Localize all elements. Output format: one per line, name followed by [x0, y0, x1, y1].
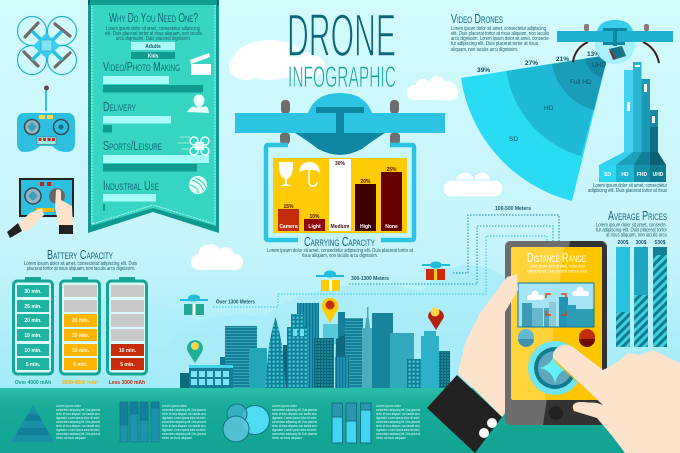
- bar: light: Light: [308, 224, 321, 230]
- text: average prices: Lorem ipsum dolor sit amet, consecte-: [596, 222, 667, 228]
- bar: high: 20%: [360, 179, 371, 185]
- label: over 1300 meters: Over 1300 Meters: [216, 300, 255, 306]
- chart: battery less 3000 mAh: 5 min.: [120, 362, 135, 368]
- mini drone: green package: [180, 294, 208, 315]
- chart: battery 3000-4000 mAh: 5 min.: [73, 362, 88, 368]
- fan labels: [477, 51, 600, 74]
- chart: battery 3000-4000 mAh: [60, 277, 100, 386]
- bar base labels: [599, 165, 666, 182]
- ground under right hand: [480, 425, 625, 453]
- icon: fragile glass: [279, 162, 293, 186]
- chart: price bars: 200$: [617, 240, 629, 246]
- text: bottom block 4: [376, 404, 421, 440]
- text: bottom block 4: dignissim. Lorem ipsum dolor sit amet,: [376, 428, 420, 432]
- bar: camera: 15%: [283, 204, 294, 210]
- bar: light: 10%: [309, 214, 320, 220]
- panel intro text: elit. Duis placerat tortor at risus aliquam, non iaculis: [105, 31, 202, 37]
- text: video quality caption: [588, 183, 667, 194]
- panel: carrying capacity chart: [273, 158, 407, 233]
- row: industrial use: Industrial Use: [103, 178, 159, 193]
- phone heading: distance range: Distance Range: [527, 250, 586, 265]
- phone text: [527, 264, 588, 274]
- cloud: behind title: [229, 40, 325, 80]
- text: bottom block 1: Lorem ipsum dolor: [56, 404, 82, 408]
- text: bottom block 1: tortor at risus aliquam, non iaculis arcu: [56, 412, 100, 416]
- map pin: green: [187, 340, 203, 363]
- bar base labels: HD: [621, 172, 629, 178]
- panel heading: Why Do You Need One?: [109, 10, 198, 25]
- row: industrial use: [103, 176, 207, 211]
- cloud: right of title: [407, 76, 458, 100]
- text: bottom block 3: consectetur adipiscing elit. Duis placerat: [272, 408, 318, 412]
- text: average prices: tur adipiscing elit. Duis placerat tortor: [596, 228, 667, 234]
- phone joystick: [528, 341, 582, 395]
- chart: battery over 4000 mAh: 15 min.: [24, 333, 42, 339]
- text: video drones: elit. Duis placerat tortor at risus aliquam, non iaculis: [451, 31, 549, 37]
- range line: 100-500 meters: [453, 215, 559, 273]
- bar: medium: Medium: [331, 224, 350, 230]
- bar base labels: UHD: [653, 172, 664, 178]
- text: bottom block 3: Lorem ipsum dolor: [272, 404, 298, 408]
- right hand: [553, 345, 680, 453]
- text: bottom block 3: tortor at risus aliquam, non iaculis arcu: [272, 424, 317, 428]
- text: bottom block 4: consectetur adipiscing elit. Duis placerat: [376, 432, 421, 436]
- text: bottom block 2: consectetur adipiscing elit. Duis placerat: [162, 408, 207, 412]
- text: bottom block 4: consectetur adipiscing elit. Duis placerat: [376, 420, 421, 424]
- label: 300-1300 meters: 300-1300 Meters: [351, 276, 389, 282]
- legend: adults: [131, 42, 175, 50]
- map pin: yellow: [322, 298, 338, 323]
- text: video drones: Lorem ipsum dolor sit amet, consectetur adipiscing: [451, 26, 546, 32]
- chart: video resolution fan: HD: [544, 105, 554, 112]
- legend: kids: [131, 52, 175, 60]
- text: carrying capacity: [267, 248, 414, 259]
- text: bottom block 3: [272, 404, 318, 440]
- text: carrying capacity: risus aliquam, non iaculis arcu dignissim.: [302, 253, 378, 259]
- bar: medium: 30%: [335, 161, 346, 167]
- text: bottom block 4: tortor at risus aliquam, non iaculis arcu: [376, 412, 420, 416]
- legend: kids: Kids: [148, 54, 159, 60]
- text: bottom block 2: tortor at risus aliquam, non iaculis arcu: [162, 424, 206, 428]
- panel intro text: Lorem ipsum dolor sit amet, consectetur adipiscing: [106, 26, 200, 32]
- text: bottom block 4: dignissim. Lorem ipsum dolor sit amet,: [376, 416, 420, 420]
- chart: video resolution fan: SD: [509, 136, 518, 143]
- chart: price bars: 300$: [635, 240, 647, 246]
- bar: light: [304, 214, 325, 231]
- row: sports/leisure: Sports/Leisure: [103, 138, 162, 153]
- phone camera view: [518, 283, 594, 327]
- text: video drones: arcu dignissim. Lorem ipsum dolor sit amet, consecte-: [451, 36, 550, 42]
- fan labels: 13%: [587, 51, 600, 58]
- cloud: left of video fan: [437, 81, 457, 101]
- text: bottom block 4: consectetur adipiscing elit. Duis placerat: [376, 408, 421, 412]
- chart: price bars: [616, 240, 667, 347]
- bar base labels: SD: [604, 172, 611, 178]
- title: DRONE: [287, 2, 396, 69]
- cloud: under video fan: [443, 172, 503, 197]
- chart: battery over 4000 mAh: 20 min.: [24, 318, 42, 324]
- icon: remote controller: [17, 86, 75, 152]
- heading: carrying capacity: Carrying Capacity: [304, 234, 375, 249]
- text: bottom block 4: Lorem ipsum dolor: [376, 404, 402, 408]
- text: bottom block 1: consectetur adipiscing elit. Duis placerat: [56, 432, 101, 436]
- panel: why do you need one: [88, 0, 219, 233]
- text: bottom block 1: [56, 404, 101, 440]
- text: video drones: aliquam, non iaculis arcu dignissim.: [451, 47, 518, 53]
- mini drone: red package: [422, 262, 450, 280]
- chart: battery over 4000 mAh: 10 min.: [24, 348, 42, 354]
- text: bottom block 4: tortor at risus aliquam, non iaculis arcu: [376, 424, 420, 428]
- range line: over 1300 meters: [213, 236, 547, 307]
- phone button: blue: [518, 329, 534, 347]
- panel intro text: arcu dignissim. Duis placerat dignissim.: [116, 36, 191, 42]
- bar: none: [381, 167, 402, 231]
- phone text: adipiscing elit. Duis placerat tortor at risus: [527, 268, 588, 274]
- chart: price bars: 530$: [654, 240, 666, 246]
- label: over 4000 mAh: Over 4000 mAh: [15, 380, 51, 386]
- text: bottom block 2: [162, 404, 207, 440]
- row: video/photo making: Video/Photo Making: [103, 59, 180, 74]
- bar: none: 25%: [386, 167, 397, 173]
- text: bottom block 1: consectetur adipiscing elit. Duis placerat: [56, 408, 101, 412]
- text: video drones: tur adipiscing elit. Duis placerat tortor at risus: [451, 41, 538, 47]
- row: delivery: Delivery: [103, 99, 136, 114]
- text: bottom block 3: consectetur adipiscing elit. Duis placerat: [272, 420, 318, 424]
- row: sports/leisure: [103, 137, 209, 172]
- heading: video drones: Video Drones: [451, 11, 503, 26]
- text: bottom block 2: dignissim. Lorem ipsum dolor sit amet,: [162, 416, 206, 420]
- panel intro text: [105, 26, 202, 42]
- chart: video resolution fan: UHD: [592, 62, 606, 69]
- video drone: [557, 20, 673, 64]
- bar: medium: [329, 159, 351, 231]
- bar: none: None: [385, 224, 398, 230]
- text: average prices: [596, 222, 667, 238]
- bar: camera: Camera: [279, 224, 298, 230]
- text: bottom block 3: tortor at risus aliquam, non iaculis arcu: [272, 412, 317, 416]
- row: delivery: [103, 94, 209, 132]
- text: video quality caption: adipiscing elit. Duis placerat tortor at risus: [588, 188, 667, 194]
- venn diagram: [223, 404, 270, 442]
- background hills: [0, 265, 530, 425]
- text: video drones: [451, 26, 550, 53]
- text: bottom block 1: tortor at risus aliquam, non iaculis arcu: [56, 424, 100, 428]
- heading: battery capacity: Battery Capacity: [47, 247, 113, 262]
- chart: battery over 4000 mAh: [14, 277, 52, 386]
- cloud: above city: [191, 244, 243, 270]
- text: average prices: at risus aliquam, non iaculis arcu: [606, 232, 667, 238]
- text: bottom block 3: dignissim. Lorem ipsum dolor sit amet,: [272, 428, 317, 432]
- bar: high: [355, 179, 376, 231]
- text: bottom block 2: tortor at risus aliquam, non iaculis arcu: [162, 412, 206, 416]
- phone button: red: [579, 329, 595, 347]
- row: video/photo making: [103, 53, 211, 92]
- chart: battery less 3000 mAh: 10 min.: [119, 348, 137, 354]
- mini pyramid chart: [11, 405, 54, 442]
- chart: video quality bars: [599, 62, 666, 182]
- chart: battery 3000-4000 mAh: 15 min.: [72, 333, 90, 339]
- ground band: [0, 388, 680, 453]
- text: bottom block 1: dignissim. Lorem ipsum dolor sit amet,: [56, 428, 100, 432]
- label: less 3000 mAh: Less 3000 mAh: [109, 380, 145, 386]
- text: bottom block 3: consectetur adipiscing elit. Duis placerat: [272, 432, 318, 436]
- text: bottom block 2: consectetur adipiscing elit. Duis placerat: [162, 432, 207, 436]
- icon: umbrella: [299, 162, 320, 186]
- text: bottom block 1: consectetur adipiscing elit. Duis placerat: [56, 420, 101, 424]
- chart: battery over 4000 mAh: 5 min.: [26, 362, 41, 368]
- fan labels: 21%: [556, 56, 569, 63]
- legend: adults: Adults: [145, 44, 161, 50]
- range line: 300-1300 meters: [349, 226, 553, 284]
- chart: video resolution fan: Full HD: [570, 79, 592, 86]
- chart: battery less 3000 mAh: [108, 277, 146, 386]
- text: battery capacity: [24, 261, 137, 272]
- text: bottom block 3: tortor at risus aliquam: [272, 436, 302, 440]
- text: battery capacity: Lorem ipsum dolor sit amet, consectetur adipiscing elit. Duis: [24, 261, 137, 267]
- bar: camera: [278, 204, 299, 231]
- chart: battery over 4000 mAh: 25 min.: [24, 304, 42, 310]
- fan labels: 39%: [477, 67, 490, 74]
- text: bottom block 1: tortor at risus aliquam: [56, 436, 86, 440]
- map pin: red: [428, 308, 444, 330]
- title: [287, 2, 396, 94]
- text: bottom block 2: consectetur adipiscing elit. Duis placerat: [162, 420, 207, 424]
- cargo drone: [235, 93, 445, 240]
- bar: high: High: [360, 224, 371, 230]
- city skyline: [180, 303, 450, 388]
- phone text: Lorem ipsum dolor sit amet, consectetur: [529, 264, 585, 268]
- label: 100-500 meters: 100-500 Meters: [495, 206, 531, 212]
- text: video quality caption: Lorem ipsum dolor sit amet, consectetur: [593, 183, 667, 189]
- chart: battery 3000-4000 mAh: 20 min.: [72, 318, 90, 324]
- text: bottom block 1: dignissim. Lorem ipsum dolor sit amet,: [56, 416, 100, 420]
- smartphone: [505, 241, 607, 425]
- left hand: [427, 274, 518, 453]
- subtitle: INFOGRAPHIC: [288, 61, 396, 94]
- text: battery capacity: placerat tortor at risus aliquam, non iaculis arcu dignissim.: [27, 266, 135, 272]
- icon: tablet with hands: [7, 178, 74, 238]
- left cuff: [427, 375, 502, 453]
- text: carrying capacity: Lorem ipsum dolor sit amet, consectetur adipiscing elit. Duis placerat tortor at: [267, 248, 414, 254]
- mini stacked bars: [332, 403, 371, 443]
- icon: quadcopter: [18, 16, 76, 74]
- text: bottom block 3: dignissim. Lorem ipsum dolor sit amet,: [272, 416, 317, 420]
- mini column chart: [120, 402, 159, 442]
- fan labels: 27%: [525, 60, 538, 67]
- bar base labels: FHD: [637, 172, 648, 178]
- chart: battery 3000-4000 mAh: 10 min.: [72, 348, 90, 354]
- mini drone: yellow package: [316, 270, 344, 291]
- text: bottom block 2: Lorem ipsum dolor: [162, 404, 188, 408]
- text: bottom block 4: tortor at risus aliquam: [376, 436, 406, 440]
- label: 3000-4000 mAh: 3000-4000 mAh: [62, 380, 98, 386]
- chart: battery over 4000 mAh: 30 min.: [24, 289, 42, 295]
- text: bottom block 2: dignissim. Lorem ipsum dolor sit amet,: [162, 428, 206, 432]
- chart: video resolution fan: [461, 51, 608, 201]
- text: bottom block 2: tortor at risus aliquam: [162, 436, 192, 440]
